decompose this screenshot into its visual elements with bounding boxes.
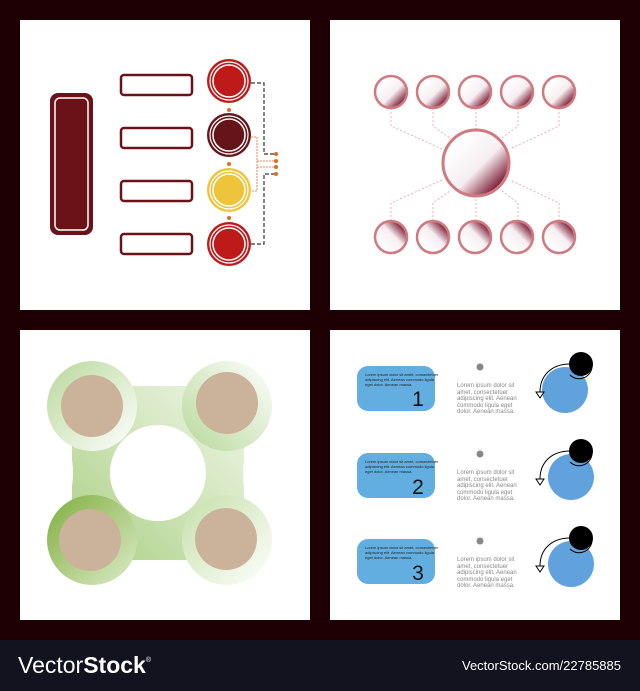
center circle xyxy=(443,130,509,196)
panel: bottom-left xyxy=(20,330,310,620)
beige circles xyxy=(59,372,258,571)
step 3: amet, consectetuer xyxy=(457,564,508,570)
step 1: eget dolor. Aenean massa. xyxy=(365,382,412,387)
step 1: commodo ligula eget xyxy=(457,403,513,409)
small circles bottom xyxy=(375,221,575,253)
step 1 xyxy=(357,352,593,415)
small circles top xyxy=(375,76,575,108)
step 2: dolor. Aenean massa. xyxy=(457,496,515,502)
step 2: 2 xyxy=(412,476,424,499)
panel: top-left xyxy=(20,20,310,310)
footer bar: VectorStock xyxy=(18,652,146,678)
dashed connectors xyxy=(391,108,559,221)
step 2: adipiscing elit. Aenean xyxy=(457,483,517,489)
panel: bottom-right xyxy=(330,330,620,620)
footer bar: ® xyxy=(146,656,152,664)
step 2 xyxy=(357,439,594,502)
step 3: Lorem ipsum dolor sit amet, consectetuer xyxy=(365,545,439,550)
step 3: 3 xyxy=(412,562,424,585)
tall bar xyxy=(50,93,93,235)
step 1: Lorem ipsum dolor sit amet, consectetuer xyxy=(365,372,439,377)
step 1: 1 xyxy=(412,388,424,411)
step 1: dolor. Aenean massa. xyxy=(457,409,515,415)
label boxes xyxy=(121,75,192,254)
step 2: Lorem ipsum dolor sit amet, consectetuer xyxy=(365,459,439,464)
step 1: Lorem ipsum dolor sit xyxy=(457,383,515,389)
step 1: amet, consectetuer xyxy=(457,390,508,396)
step 2: adipiscing elit. Aenean commodo ligula xyxy=(365,464,435,469)
step 2: commodo ligula eget xyxy=(457,490,513,496)
step 1: adipiscing elit. Aenean commodo ligula xyxy=(365,377,435,382)
step 3: adipiscing elit. Aenean commodo ligula xyxy=(365,550,435,555)
footer bar xyxy=(0,640,640,691)
step 3: dolor. Aenean massa. xyxy=(457,583,515,589)
footer bar: VectorStock.com/22785885 xyxy=(462,658,621,673)
step 3 xyxy=(357,526,594,589)
green blob xyxy=(47,361,272,585)
step 3: Lorem ipsum dolor sit xyxy=(457,557,515,563)
circles xyxy=(207,59,251,266)
step 3: eget dolor. Aenean massa. xyxy=(365,555,412,560)
panel: top-right xyxy=(330,20,620,310)
step 3: commodo ligula eget xyxy=(457,577,513,583)
connector lines xyxy=(251,83,278,244)
step 2: amet, consectetuer xyxy=(457,477,508,483)
step 3: adipiscing elit. Aenean xyxy=(457,570,517,576)
step 1: adipiscing elit. Aenean xyxy=(457,396,517,402)
step 2: eget dolor. Aenean massa. xyxy=(365,469,412,474)
step 2: Lorem ipsum dolor sit xyxy=(457,470,515,476)
